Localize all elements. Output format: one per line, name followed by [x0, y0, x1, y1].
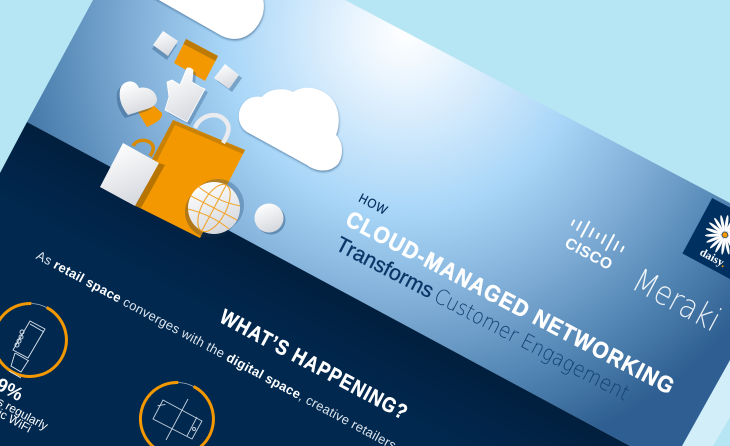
icon ring: hand holding phone — [0, 303, 66, 378]
daisy petals — [698, 208, 730, 262]
daisy centre — [721, 231, 728, 238]
subheading: transforms: Transforms — [332, 232, 438, 303]
icon: ball — [254, 204, 286, 234]
second page strip — [682, 360, 730, 446]
heading: cloud-managed networking: CLOUD-MANAGED NETWORKING — [342, 206, 680, 400]
phone — [153, 399, 202, 440]
ring gap — [178, 382, 194, 386]
icon: pointing hand — [165, 68, 208, 125]
panel: what's happening — [0, 122, 630, 446]
orange ring — [0, 303, 66, 376]
icon: small orange heart — [138, 105, 162, 127]
cisco wordmark: CISCO — [562, 235, 615, 274]
orange ring — [140, 382, 213, 446]
icon: orange tile — [174, 39, 218, 81]
cloud: large — [239, 88, 342, 171]
icon ring: rotating phone — [140, 382, 213, 446]
phone in hand — [9, 321, 45, 378]
icon: small square right — [214, 64, 242, 92]
icon: orange shopping bag — [135, 115, 245, 238]
bag handle — [195, 115, 229, 143]
subheading: customer engagement: Customer Engagement — [430, 284, 634, 405]
logo: cisco — [559, 215, 626, 275]
icon: globe — [185, 179, 244, 238]
label: how: HOW — [356, 190, 391, 218]
icon: white shopping bag — [100, 140, 159, 206]
bag handle — [133, 140, 153, 156]
cisco bars — [569, 215, 626, 257]
ring gap — [31, 304, 47, 308]
icon: white heart — [117, 81, 157, 118]
logo: daisy — [682, 198, 730, 285]
cloud: top — [150, 0, 264, 39]
section heading: WHAT’S HAPPENING? — [216, 305, 412, 425]
daisy background — [682, 198, 730, 285]
icon: small square left — [152, 31, 178, 60]
daisy wordmark: daisy. — [698, 247, 728, 270]
